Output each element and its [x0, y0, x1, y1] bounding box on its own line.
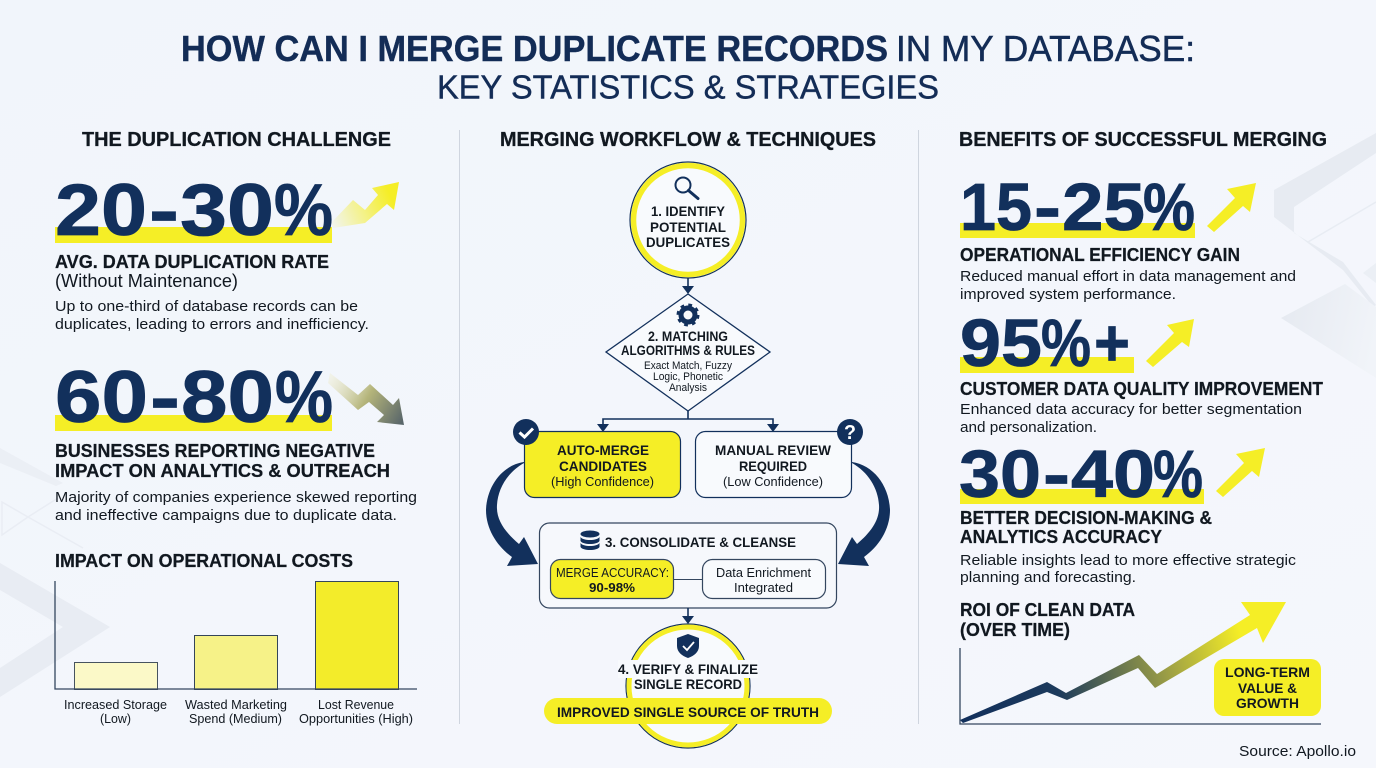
step 1: identify potential duplicates: DUPLICATES [646, 234, 730, 250]
stat label: average duplication rate: AVG. DATA DUPLICATION RATE [55, 252, 329, 272]
stat text: operational efficiency: Reduced manual effort in data management and [960, 268, 1296, 285]
icon: up arrow 1 [1207, 183, 1256, 232]
callout: long-term value and growth: VALUE & [1238, 680, 1297, 696]
heading: ROI of clean data [960, 600, 1135, 640]
box: manual review required [696, 432, 852, 498]
stat: 15-25%: 25 [1062, 170, 1145, 245]
step 2: matching algorithms and rules: ALGORITHMS & RULES [621, 342, 755, 358]
stat: 95%+: 95 [960, 306, 1042, 381]
stat text: operational efficiency: OPERATIONAL EFFICIENCY GAIN [960, 245, 1240, 265]
box: auto-merge candidates [524, 432, 680, 498]
icon: question badge [837, 419, 863, 445]
box: manual review required: MANUAL REVIEW [715, 442, 832, 458]
heading: benefits: BENEFITS OF SUCCESSFUL MERGING [959, 129, 1327, 151]
icon: check badge [513, 419, 539, 445]
stat: 95%+ [960, 306, 1134, 381]
stat: 15-25%: - [1034, 170, 1061, 245]
stat description: negative impact: Majority of companies experience skewed reporting [55, 489, 417, 506]
step 1: identify potential duplicates: POTENTIAL [650, 219, 726, 235]
step 4: verify and finalize [544, 624, 832, 748]
title [181, 28, 1195, 106]
arrow: auto-merge to consolidate [486, 462, 538, 566]
stat: 20-30%: % [274, 170, 333, 251]
stat: 20-30%: - [149, 170, 179, 251]
step 1: identify potential duplicates [630, 162, 746, 278]
stat label: average duplication rate [55, 252, 329, 291]
stat: 30-40%: 40 [1071, 437, 1155, 512]
stat: 60-80%: 80 [181, 357, 274, 438]
stat: 95%+: + [1094, 306, 1130, 381]
stat text: decision-making: planning and forecasting. [960, 569, 1136, 586]
stat: 30-40%: - [1043, 437, 1070, 512]
stat label: average duplication rate: (Without Maintenance) [55, 271, 238, 291]
stat: 60-80%: 60 [55, 357, 148, 438]
stat text: decision-making [960, 508, 1297, 586]
heading: impact on operational costs: IMPACT ON OPERATIONAL COSTS [55, 551, 353, 571]
step 4: verify and finalize: SINGLE RECORD [634, 676, 742, 692]
heading: ROI of clean data: (OVER TIME) [960, 620, 1070, 640]
stat text: operational efficiency: improved system performance. [960, 286, 1176, 303]
stat description: duplication rate: duplicates, leading to errors and inefficiency. [55, 316, 369, 333]
panel: merging workflow and techniques [486, 129, 890, 748]
stat label: negative impact: IMPACT ON ANALYTICS & OUTREACH [55, 461, 390, 481]
stat text: operational efficiency [960, 245, 1296, 303]
step 3: consolidate and cleanse: Data Enrichment [716, 566, 812, 580]
step 3: consolidate and cleanse: 3. CONSOLIDATE & CLEANSE [605, 534, 796, 550]
panel: the duplication challenge [55, 129, 417, 726]
step 2: matching algorithms and rules [606, 294, 770, 411]
stat: 60-80%: % [275, 357, 333, 438]
stat text: customer data quality: CUSTOMER DATA QUALITY IMPROVEMENT [960, 379, 1323, 399]
step 3: consolidate and cleanse: MERGE ACCURACY: [556, 565, 669, 580]
stat: 15-25%: % [1143, 170, 1195, 245]
callout: long-term value and growth [1214, 659, 1321, 716]
stat description: duplication rate [55, 298, 369, 333]
step 3: consolidate and cleanse: Integrated [734, 581, 793, 595]
title: HOW CAN I MERGE DUPLICATE RECORDS [181, 28, 888, 69]
stat label: negative impact: BUSINESSES REPORTING NEGATIVE [55, 441, 375, 461]
bar chart: operational costs: Spend (Medium) [189, 712, 282, 726]
arrow: branch to outcomes [597, 411, 779, 432]
stat: 60-80%: - [150, 357, 180, 438]
line chart: ROI over time [960, 602, 1321, 724]
step 2: matching algorithms and rules: Exact Match, Fuzzy [644, 360, 732, 372]
stat description: duplication rate: Up to one-third of database records can be [55, 298, 358, 315]
stat label: negative impact [55, 441, 390, 481]
bar chart: operational costs [55, 581, 417, 726]
box: auto-merge candidates: (High Confidence) [551, 474, 654, 489]
bar chart: operational costs: (Low) [100, 712, 131, 726]
heading: merging workflow: MERGING WORKFLOW & TECHNIQUES [500, 129, 876, 151]
bar chart: operational costs: Wasted Marketing [185, 698, 287, 712]
step 2: matching algorithms and rules: Logic, Phonetic [653, 371, 723, 383]
icon: up arrow 3 [1216, 448, 1265, 497]
bar chart: operational costs: Lost Revenue [318, 698, 394, 712]
arrow: manual review to consolidate [838, 462, 890, 566]
title: KEY STATISTICS & STRATEGIES [437, 70, 939, 106]
stat: 20-30% [55, 170, 333, 251]
callout: long-term value and growth: LONG-TERM [1225, 664, 1310, 680]
source credit: Source: Apollo.io [1239, 744, 1356, 760]
stat: 30-40%: 30 [959, 437, 1041, 512]
step 4: verify and finalize: IMPROVED SINGLE SOURCE OF TRUTH [557, 704, 819, 720]
step 3: consolidate and cleanse [540, 523, 836, 608]
step 1: identify potential duplicates: 1. IDENTIFY [651, 203, 726, 219]
icon: up arrow 2 [1146, 319, 1194, 367]
step 2: matching algorithms and rules: 2. MATCHING [648, 328, 728, 344]
box: manual review required: REQUIRED [739, 458, 807, 474]
icon: rising zigzag arrow [332, 182, 399, 228]
step 3: consolidate and cleanse: 90-98% [589, 580, 635, 595]
stat text: decision-making: ANALYTICS ACCURACY [960, 527, 1162, 547]
bar chart: operational costs: Opportunities (High) [299, 712, 413, 726]
arrow: step 1 to step 2 [682, 278, 694, 294]
callout: long-term value and growth: GROWTH [1236, 695, 1299, 711]
icon: question badge: ? [844, 422, 856, 444]
stat description: negative impact: and ineffective campaigns due to duplicate data. [55, 507, 397, 524]
stat: 15-25%: 15 [960, 170, 1032, 245]
stat: 20-30%: 30 [180, 170, 274, 251]
stat text: decision-making: Reliable insights lead to more effective strategic [960, 552, 1297, 569]
arrow: step 3 to step 4 [682, 608, 694, 624]
stat text: customer data quality: Enhanced data accuracy for better segmentation [960, 401, 1302, 418]
stat: 20-30%: 20 [55, 170, 147, 251]
stat description: negative impact [55, 489, 417, 524]
stat: 60-80% [55, 357, 333, 438]
stat: 15-25% [960, 170, 1195, 245]
icon: falling zigzag arrow [328, 373, 404, 425]
heading: the duplication challenge: THE DUPLICATION CHALLENGE [82, 129, 391, 151]
bar chart: operational costs: Increased Storage [64, 698, 167, 712]
stat: 30-40% [959, 437, 1204, 512]
box: manual review required: (Low Confidence) [723, 474, 823, 489]
title: IN MY DATABASE: [896, 28, 1195, 69]
step 2: matching algorithms and rules: Analysis [669, 382, 707, 394]
stat text: customer data quality: and personalization. [960, 419, 1097, 436]
step 4: verify and finalize: 4. VERIFY & FINALIZE [618, 661, 758, 677]
heading: ROI of clean data: ROI OF CLEAN DATA [960, 600, 1135, 620]
panel: benefits of successful merging [959, 129, 1327, 724]
box: auto-merge candidates: CANDIDATES [559, 458, 647, 474]
stat: 95%+: % [1041, 306, 1091, 381]
stat text: customer data quality [960, 379, 1323, 436]
stat: 30-40%: % [1153, 437, 1203, 512]
stat text: decision-making: BETTER DECISION-MAKING & [960, 508, 1212, 528]
box: auto-merge candidates: AUTO-MERGE [557, 442, 649, 458]
